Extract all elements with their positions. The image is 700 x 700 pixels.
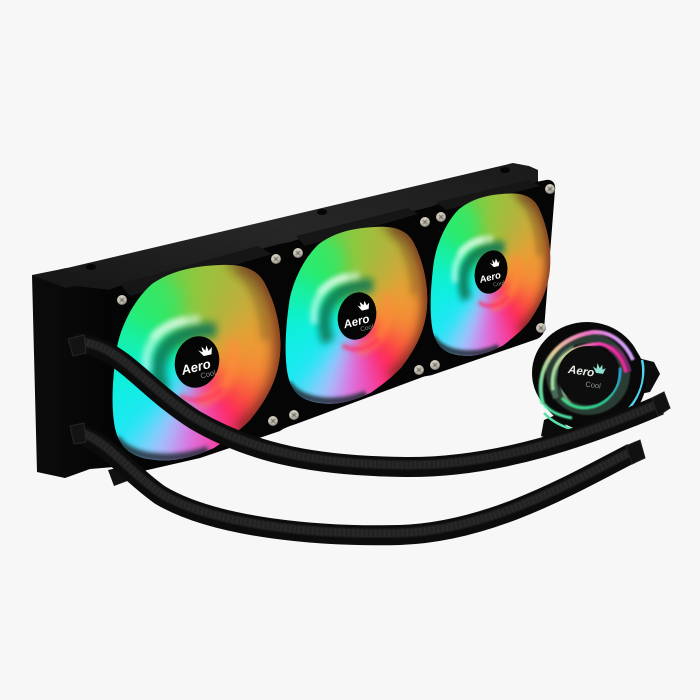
fan 1 logo <box>176 344 219 385</box>
fan 1 <box>112 264 280 460</box>
lower tube end cap right <box>626 440 645 464</box>
fan 2 colour sweep <box>286 226 428 404</box>
product illustration: liquid cooler <box>32 163 671 546</box>
fan 3 logo <box>475 258 506 292</box>
fan 2 logo: Cool <box>360 323 375 333</box>
lower tube <box>70 423 645 535</box>
fan 2 logo <box>338 300 376 337</box>
upper tube <box>68 335 670 467</box>
fan frames <box>108 180 555 474</box>
lower tube end cap left <box>70 423 86 444</box>
fan 2 hub <box>332 288 382 344</box>
radiator fitting <box>108 466 130 486</box>
frame screws <box>117 184 555 426</box>
pump logo <box>565 359 606 391</box>
fan 3 hub <box>470 247 512 297</box>
fan 2 <box>286 226 428 404</box>
pump mounting lugs <box>630 358 660 396</box>
pump base ring <box>538 329 646 431</box>
radiator top face <box>32 163 538 292</box>
fan 3 colour sweep <box>430 194 550 356</box>
radiator side face <box>32 275 126 478</box>
pump logo: Cool <box>585 380 602 391</box>
fan 1 logo: Aero <box>179 356 212 378</box>
top mounting holes <box>86 167 510 270</box>
upper tube end cap right <box>652 392 670 416</box>
pump infinity rings <box>541 332 633 418</box>
pump unit <box>532 322 660 441</box>
upper tube end cap left <box>68 335 86 356</box>
radiator <box>32 163 538 478</box>
fan 1 colour sweep <box>112 264 280 460</box>
fan 3 logo: Aero <box>477 270 502 286</box>
fan 3 logo: Cool <box>493 280 505 289</box>
fan 3 <box>430 194 550 356</box>
pump face <box>532 322 642 424</box>
pump hub <box>558 346 618 404</box>
pump logo: Aero <box>566 364 595 380</box>
fan 1 logo: Cool <box>199 368 217 380</box>
fan 2 logo: Aero <box>341 313 371 332</box>
fan 1 hub <box>169 331 225 393</box>
